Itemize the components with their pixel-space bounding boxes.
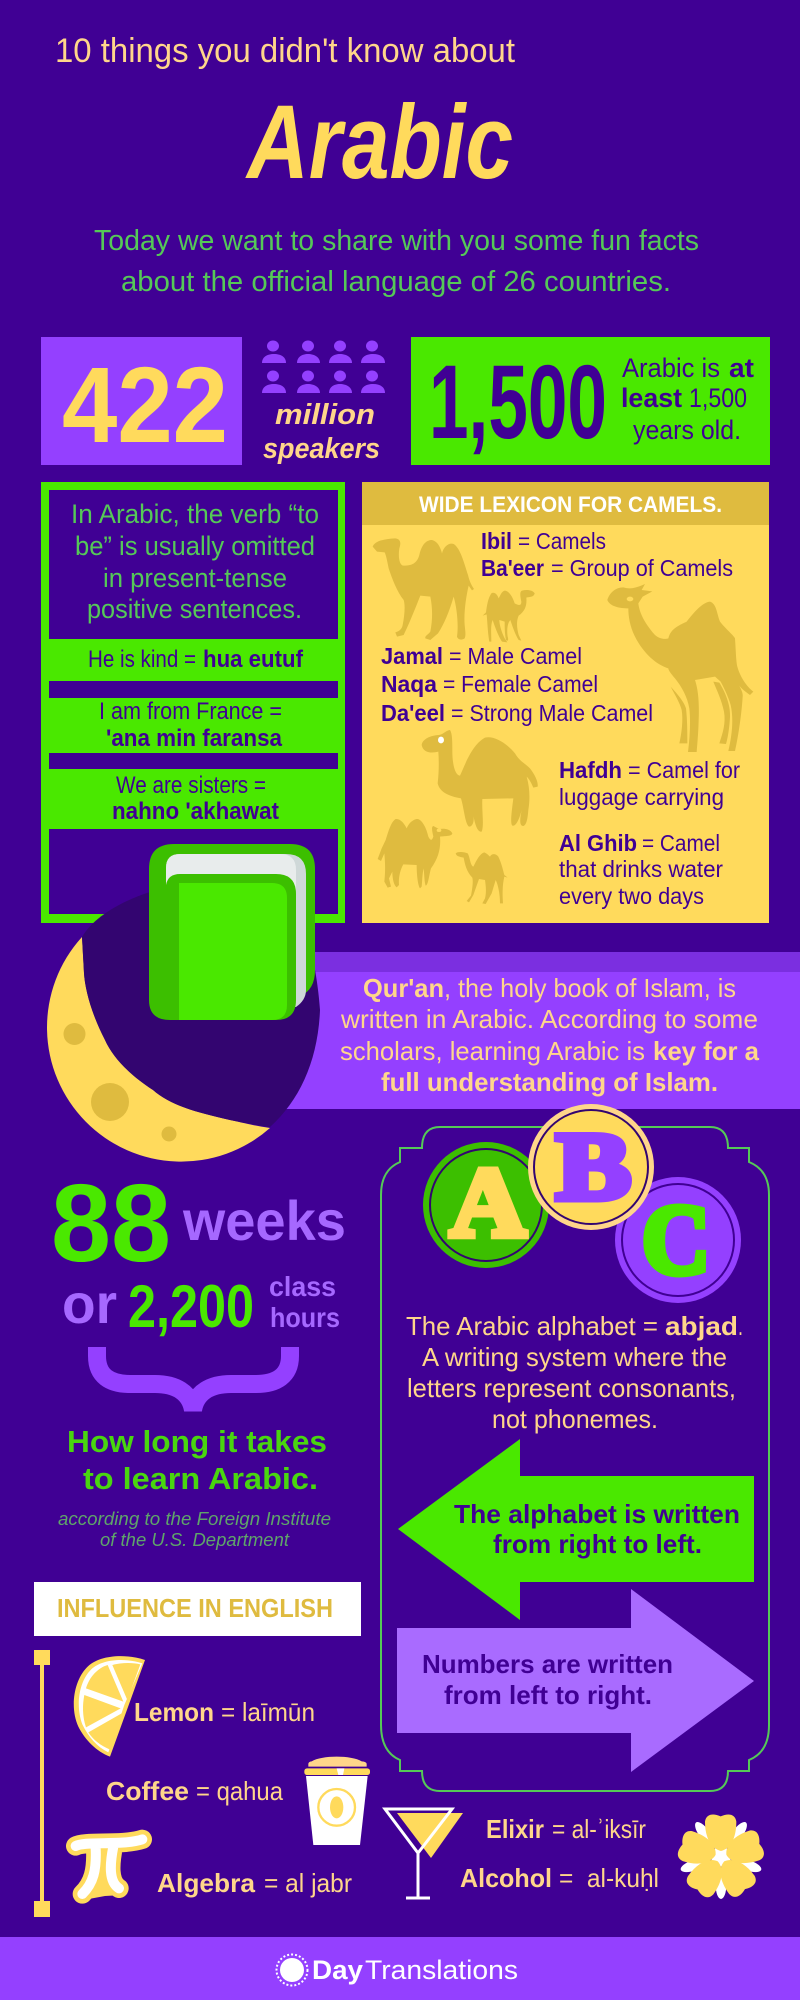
source note: of the U.S. Department bbox=[100, 1530, 290, 1550]
stat: 88 weeks or 2,200 class hours: hours bbox=[270, 1302, 340, 1333]
example sentences: We are sisters = bbox=[116, 772, 266, 799]
heading: Arabic: Arabic bbox=[245, 84, 513, 201]
camel terms: Jamal bbox=[381, 643, 443, 669]
panel: 422 speakers stat: 422 bbox=[62, 344, 228, 465]
abjad text: abjad bbox=[665, 1311, 738, 1341]
source note: according to the Foreign Institute bbox=[58, 1509, 331, 1529]
camel terms: every two days bbox=[559, 883, 704, 909]
icon: crescent moon bbox=[47, 892, 320, 1162]
camel terms: Naqa bbox=[381, 671, 437, 697]
verb explanation text: be” is usually omitted bbox=[75, 531, 315, 561]
verb explanation text bbox=[71, 499, 319, 624]
icon: letter C badge bbox=[615, 1177, 741, 1303]
camel silhouettes bbox=[373, 538, 753, 904]
footer band bbox=[0, 1937, 800, 2000]
term: algebra: = al jabr bbox=[264, 1868, 352, 1898]
term: alcohol: = al-kuḥl bbox=[559, 1863, 659, 1893]
camel terms: = Group of Camels bbox=[551, 555, 733, 581]
Qur'an text: Qur'an bbox=[363, 973, 444, 1003]
panel: camel lexicon bbox=[362, 482, 769, 923]
stat: 88 weeks or 2,200 class hours bbox=[51, 1162, 346, 1340]
panel: 1,500 years old stat: years old. bbox=[633, 415, 741, 445]
panel heading: influence in English: INFLUENCE IN ENGLISH bbox=[57, 1593, 333, 1623]
panel heading: WIDE LEXICON FOR CAMELS. bbox=[419, 492, 722, 517]
Qur'an text: full understanding of Islam. bbox=[381, 1067, 718, 1097]
panel: 1,500 years old stat: least bbox=[621, 383, 682, 413]
intro text bbox=[94, 225, 699, 298]
term: lemon: = laīmūn bbox=[221, 1697, 315, 1727]
abjad text: The Arabic alphabet = bbox=[406, 1311, 658, 1341]
camel terms: luggage carrying bbox=[559, 784, 724, 810]
icon: group of people bbox=[262, 340, 385, 393]
icon: letter A badge: A bbox=[450, 1147, 526, 1258]
camel terms: Ibil bbox=[481, 528, 512, 554]
camel terms: = Male Camel bbox=[449, 643, 582, 669]
logo: Day Translations: Day bbox=[312, 1955, 363, 1985]
stat: 88 weeks or 2,200 class hours: or bbox=[62, 1272, 117, 1335]
abjad text bbox=[406, 1311, 743, 1434]
icon: letter A badge bbox=[423, 1142, 549, 1268]
icon: curly brace bbox=[97, 1347, 290, 1410]
panel: Qur'an band bbox=[280, 952, 800, 1109]
text: how long it takes: to learn Arabic. bbox=[83, 1461, 318, 1496]
camel terms: = Female Camel bbox=[443, 671, 598, 697]
camel terms: that drinks water bbox=[559, 856, 723, 882]
example sentences: nahno 'akhawat bbox=[112, 798, 279, 825]
panel: 1,500 years old stat: 1,500 bbox=[689, 383, 747, 413]
verb explanation text: in present-tense bbox=[103, 563, 287, 593]
arrow: left to right bbox=[397, 1589, 754, 1772]
label: million speakers: million bbox=[275, 399, 375, 431]
camel terms: Hafdh bbox=[559, 757, 622, 783]
abjad text: . bbox=[738, 1311, 743, 1341]
arrow: left to right: from left to right. bbox=[444, 1680, 652, 1710]
term: coffee: Coffee bbox=[106, 1776, 189, 1806]
intro text: Today we want to share with you some fun facts bbox=[94, 225, 699, 257]
timeline bar bbox=[34, 1650, 50, 1917]
icon: pi symbol bbox=[76, 1839, 142, 1900]
term: elixir: Elixir bbox=[486, 1814, 544, 1844]
text: how long it takes: How long it takes bbox=[67, 1424, 327, 1459]
term: coffee: = qahua bbox=[196, 1776, 283, 1806]
icon: letter C badge: C bbox=[642, 1184, 710, 1295]
intro text: about the official language of 26 countries. bbox=[121, 266, 671, 298]
icon: martini glass bbox=[385, 1809, 463, 1898]
Qur'an text: key for a bbox=[653, 1036, 760, 1066]
Qur'an text: written in Arabic. According to some bbox=[340, 1004, 758, 1034]
Qur'an text: scholars, learning Arabic is bbox=[340, 1036, 645, 1066]
camel terms: = Camels bbox=[518, 528, 606, 554]
stat: 88 weeks or 2,200 class hours: 2,200 bbox=[128, 1273, 254, 1340]
camel terms: Al Ghib bbox=[559, 830, 637, 856]
camel terms: = Camel bbox=[642, 830, 720, 856]
example sentences: 'ana min faransa bbox=[106, 725, 283, 752]
panel: 1,500 years old stat: Arabic is bbox=[622, 353, 720, 383]
arrow: left to right: Numbers are written bbox=[422, 1649, 673, 1679]
stat: 88 weeks or 2,200 class hours: 88 bbox=[51, 1162, 171, 1285]
panel heading: influence in English bbox=[34, 1582, 361, 1636]
camel terms bbox=[381, 528, 740, 909]
term: lemon: Lemon bbox=[134, 1697, 214, 1727]
label: million speakers bbox=[263, 399, 380, 465]
example sentences: He is kind = bbox=[88, 646, 196, 673]
title line: 10 things you didn't know about bbox=[55, 32, 516, 70]
source note bbox=[58, 1509, 331, 1550]
example sentences: hua eutuf bbox=[203, 646, 304, 673]
logo: Day Translations: Translations bbox=[365, 1955, 518, 1985]
camel terms: Ba'eer bbox=[481, 555, 544, 581]
arrow: right to left: The alphabet is written bbox=[454, 1499, 740, 1529]
camel terms: Da'eel bbox=[381, 700, 445, 726]
icon: letter B badge: B bbox=[556, 1113, 631, 1220]
stat: 88 weeks or 2,200 class hours: weeks bbox=[182, 1189, 346, 1252]
arrow: right to left: from right to left. bbox=[493, 1529, 702, 1559]
abjad text: not phonemes. bbox=[492, 1404, 658, 1434]
verb explanation text: positive sentences. bbox=[87, 594, 302, 624]
panel: 1,500 years old stat: at bbox=[729, 353, 754, 383]
term: algebra: Algebra bbox=[157, 1868, 256, 1898]
panel: 1,500 years old stat bbox=[411, 337, 770, 465]
icon: coffee cup bbox=[304, 1757, 370, 1845]
icon: book bbox=[149, 844, 315, 1020]
abjad text: letters represent consonants, bbox=[407, 1373, 736, 1403]
panel: 1,500 years old stat: 1,500 bbox=[429, 344, 607, 461]
camel terms: = Strong Male Camel bbox=[451, 700, 653, 726]
label: million speakers: speakers bbox=[263, 433, 380, 465]
example sentences bbox=[88, 646, 304, 825]
icon: lemon slice bbox=[74, 1656, 145, 1757]
camel terms: = Camel for bbox=[628, 757, 740, 783]
logo: Day Translations bbox=[276, 1954, 518, 1986]
verb explanation text: In Arabic, the verb “to bbox=[71, 499, 319, 529]
term: alcohol: Alcohol bbox=[460, 1863, 552, 1893]
term: elixir: = al-ʾiksīr bbox=[552, 1814, 646, 1844]
icon: flower bbox=[676, 1814, 766, 1900]
stat: 88 weeks or 2,200 class hours: class bbox=[269, 1271, 336, 1302]
example sentences: I am from France = bbox=[99, 698, 282, 725]
text: how long it takes bbox=[67, 1424, 327, 1496]
panel: alphabet frame bbox=[381, 1127, 769, 1791]
icon: letter B badge bbox=[528, 1104, 654, 1230]
panel: verb to be bbox=[41, 482, 345, 923]
arrow: right to left bbox=[398, 1439, 754, 1620]
Qur'an text bbox=[340, 973, 760, 1097]
Qur'an text: , the holy book of Islam, is bbox=[444, 973, 736, 1003]
abjad text: A writing system where the bbox=[422, 1342, 727, 1372]
